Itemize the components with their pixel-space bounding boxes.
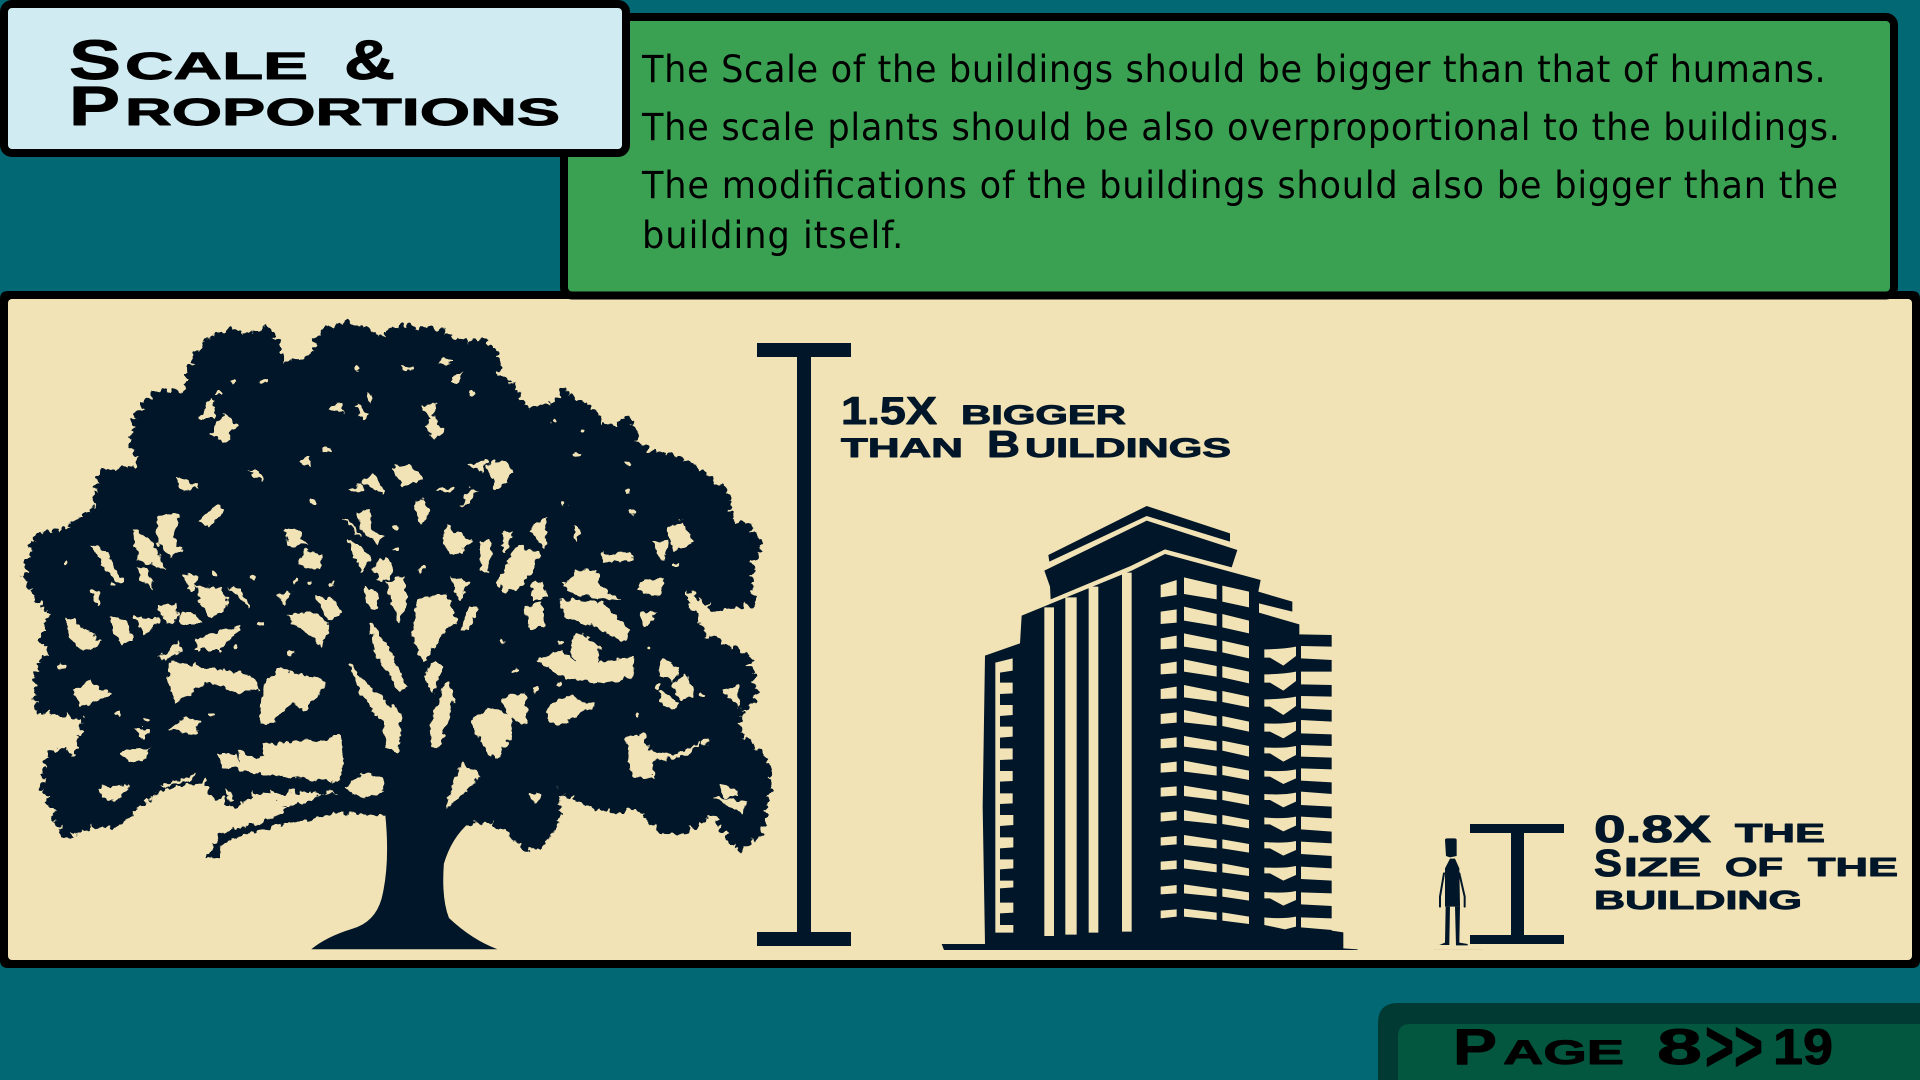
heading line 2: P bbox=[69, 74, 120, 137]
ground line bbox=[1434, 948, 1483, 951]
tree trunk bbox=[311, 777, 497, 949]
text block: scale of buildings: The Scale of the buildings should be bigger than that of humans. bbox=[641, 48, 1826, 91]
label line 2: THAN bbox=[841, 433, 963, 463]
panel: title bbox=[4, 4, 626, 153]
label line 1: BIGGER bbox=[961, 400, 1126, 430]
page number text: 19 bbox=[1773, 1019, 1833, 1075]
page indicator tab bbox=[1378, 1003, 1920, 1080]
label line 2: IZE bbox=[1624, 852, 1701, 882]
heading line 2: ROPORTIONS bbox=[125, 92, 560, 134]
arms bbox=[1440, 873, 1465, 907]
text block: modifications: The modifications of the buildings should also be bigger than the bbox=[641, 164, 1838, 207]
heading line 1: & bbox=[344, 28, 395, 91]
icon: height bar for human bbox=[1470, 824, 1564, 944]
label line 1: THE bbox=[1735, 818, 1825, 848]
heading line 1: S bbox=[69, 28, 121, 91]
label line 2: THE bbox=[1808, 852, 1898, 882]
label line 3: BUILDING bbox=[1594, 885, 1802, 915]
label line 1: 0.8X bbox=[1594, 809, 1712, 851]
icon: human figure bbox=[1434, 838, 1483, 950]
panel: description text bbox=[564, 17, 1894, 296]
building windows and stripes bbox=[995, 573, 1332, 936]
text block: modifications continued: building itself. bbox=[642, 214, 903, 257]
label line 2: B bbox=[987, 424, 1020, 466]
label: tree scale bbox=[841, 390, 1231, 466]
torso bbox=[1445, 859, 1460, 907]
tree small specks of light bbox=[61, 369, 704, 742]
label line 2: OF bbox=[1725, 852, 1783, 882]
heading line 1: CALE bbox=[125, 46, 308, 88]
tree gaps between branches bbox=[61, 359, 745, 814]
page number text: 8 bbox=[1657, 1019, 1702, 1075]
legs and feet bbox=[1439, 907, 1468, 945]
label line 2: UILDINGS bbox=[1025, 433, 1231, 463]
tree canopy bbox=[27, 324, 768, 849]
head bbox=[1445, 838, 1457, 857]
building body and roof bbox=[942, 506, 1358, 950]
icon: tree silhouette bbox=[27, 324, 768, 949]
label line 1: 1.5X bbox=[841, 390, 937, 433]
icon: height bar for tree bbox=[757, 343, 851, 946]
tree low branch bbox=[115, 786, 393, 859]
text block: scale of plants: The scale plants should be also overproportional to the buildings. bbox=[641, 106, 1840, 149]
label: human scale bbox=[1594, 809, 1898, 915]
icon: building silhouette bbox=[942, 506, 1358, 950]
label line 2: S bbox=[1594, 843, 1622, 885]
panel: illustration bbox=[0, 291, 1920, 968]
page number text: AGE bbox=[1503, 1034, 1624, 1072]
page number text: P bbox=[1453, 1019, 1497, 1075]
